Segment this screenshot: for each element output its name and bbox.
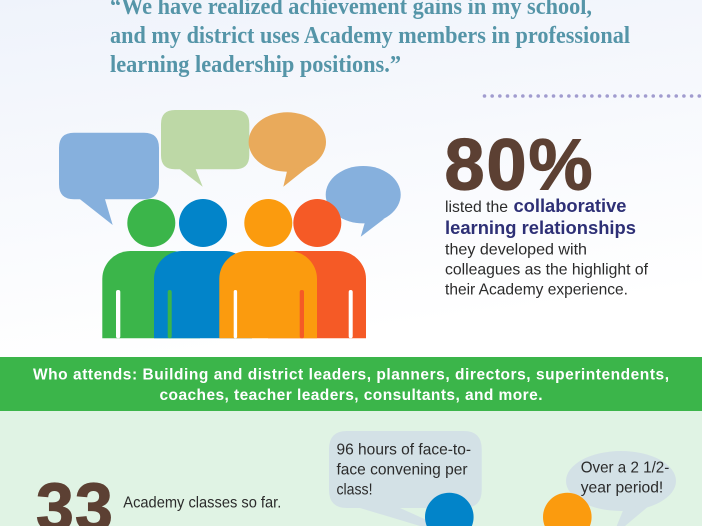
person: orange — [219, 199, 317, 338]
person: red — [268, 199, 366, 338]
statistic: 80%: 80% — [444, 126, 593, 206]
speech bubble: time period: Over a 2 1/2- — [581, 459, 669, 476]
statistic: 33 classes — [36, 469, 281, 526]
statistic description: collaborative — [514, 195, 626, 216]
speech bubble: blue oval — [326, 166, 401, 237]
statistic: 33 classes: Academy classes so far. — [123, 494, 281, 511]
banner: who attends: coaches, teacher leaders, consultants, and more. — [160, 387, 542, 404]
speech bubble: 96 hours: face convening per — [336, 461, 468, 478]
quote: learning leadership positions.” — [110, 52, 401, 78]
person head: orange — [543, 493, 592, 526]
background: top section — [0, 0, 702, 357]
speech bubble: orange oval — [249, 112, 326, 187]
statistic description: they developed with — [445, 241, 587, 258]
speech bubble: green rectangle — [161, 110, 249, 187]
statistic description: colleagues as the highlight of — [445, 261, 649, 278]
banner: who attends — [0, 357, 702, 411]
banner: who attends: Who attends: Building and district leaders, planners, directors, superintendents, — [33, 366, 669, 383]
statistic description: listed the — [445, 199, 508, 216]
speech bubble: 96 hours: 96 hours of face-to- — [336, 441, 471, 458]
speech bubble: 96 hours: class! — [336, 482, 372, 498]
speech bubble: 96 hours — [329, 431, 482, 526]
illustration: group of people with speech bubbles — [59, 110, 401, 338]
statistic description: learning relationships — [445, 217, 636, 238]
speech bubble: time period: year period! — [581, 480, 663, 497]
person: blue — [154, 199, 252, 338]
person: green — [102, 199, 200, 338]
quote — [110, 0, 630, 78]
statistic description: their Academy experience. — [445, 281, 628, 298]
quote: and my district uses Academy members in professional — [110, 23, 630, 49]
statistic description — [445, 195, 649, 298]
speech bubble: time period — [566, 451, 676, 526]
speech bubble: blue rectangle — [59, 133, 159, 225]
background: lower section — [0, 411, 702, 526]
person head: blue — [425, 493, 474, 526]
